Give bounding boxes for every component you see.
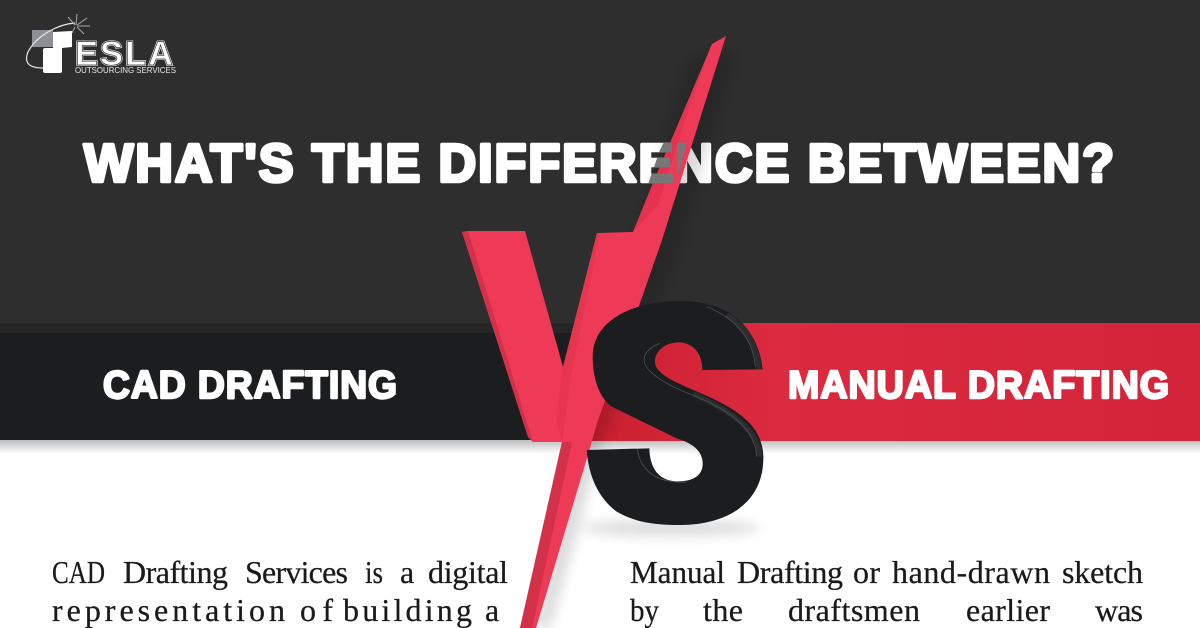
panel: CAD drafting bar <box>0 323 600 440</box>
text block: manual drafting description <box>630 554 1143 628</box>
letter V shadow <box>535 50 735 628</box>
text block: CAD drafting description: building <box>343 592 472 628</box>
logo: Tesla Outsourcing Services: ESLA <box>75 35 175 73</box>
text block: manual drafting description: draftsmen <box>788 592 920 628</box>
logo: Tesla Outsourcing Services: ESLA <box>75 35 175 73</box>
text block: manual drafting description: Drafting <box>737 554 843 590</box>
title letters seen through V arm: WHAT'S THE DIFFERENCE BETWEEN? <box>84 134 1116 194</box>
text block: CAD drafting description: Services <box>245 554 348 590</box>
title: WHAT'S THE DIFFERENCE BETWEEN? <box>84 134 1116 194</box>
text block: manual drafting description: earlier <box>966 592 1050 628</box>
text block: CAD drafting description: a <box>485 592 499 628</box>
text block: CAD drafting description: of <box>300 592 333 628</box>
logo: Tesla Outsourcing Services: OUTSOURCING SERVICES <box>75 66 176 75</box>
text block: CAD drafting description: CAD <box>52 554 105 590</box>
text block: CAD drafting description: is <box>365 554 383 590</box>
heading: CAD Drafting: CAD DRAFTING <box>103 364 398 407</box>
letter S <box>587 301 763 525</box>
text block: manual drafting description: sketch <box>1062 554 1143 590</box>
shadow under bars <box>0 440 1200 454</box>
text block: manual drafting description: by <box>630 592 659 628</box>
text block: manual drafting description: was <box>1095 592 1143 628</box>
text block: CAD drafting description: digital <box>428 554 508 590</box>
text block: CAD drafting description <box>52 554 508 628</box>
panel: white lower background <box>0 440 1200 628</box>
text block: manual drafting description: Manual <box>630 554 725 590</box>
text block: manual drafting description: the <box>703 592 743 628</box>
logo: Tesla Outsourcing Services <box>27 14 176 75</box>
heading: Manual Drafting: MANUAL DRAFTING <box>788 364 1170 407</box>
letter V <box>462 36 726 628</box>
panel: manual drafting bar <box>590 323 1200 441</box>
text block: CAD drafting description: Drafting <box>123 554 228 590</box>
text block: CAD drafting description: a <box>400 554 414 590</box>
text block: CAD drafting description: representation <box>52 592 285 628</box>
text block: manual drafting description: hand-drawn <box>892 554 1050 590</box>
panel: dark upper background <box>0 0 1200 330</box>
letter S shadow <box>580 520 760 536</box>
VS emblem <box>462 36 764 628</box>
text block: manual drafting description: or <box>853 554 880 590</box>
icon: star flare <box>68 14 90 34</box>
